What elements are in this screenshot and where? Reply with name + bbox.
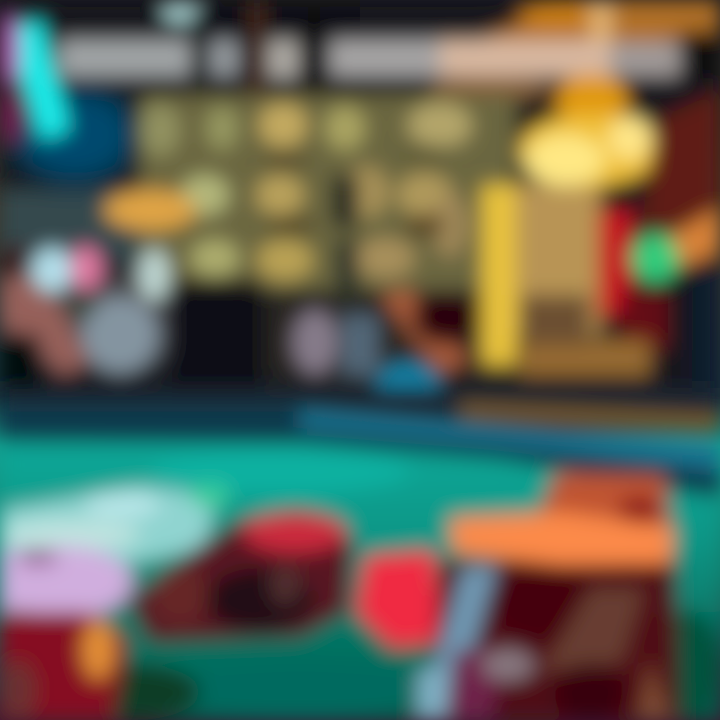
red curtain and green light [598, 90, 720, 408]
felt shading [70, 450, 720, 720]
top-left teal light [0, 0, 202, 183]
table felt [0, 442, 720, 720]
golden grid of blurred text [140, 95, 515, 300]
right chip stack [418, 473, 678, 720]
top-right gold streaks [480, 0, 720, 85]
warm column behind chandelier [515, 185, 600, 335]
white card glare on felt [0, 483, 230, 570]
background: upper room [0, 0, 720, 430]
middle red chips [128, 510, 354, 642]
title band [60, 0, 680, 120]
dark figures in middle [172, 280, 650, 406]
table rail [0, 388, 720, 505]
yellow chandelier glow [520, 74, 660, 186]
bright red chip [356, 550, 440, 648]
people at left [0, 244, 169, 390]
left chip stack [0, 546, 132, 720]
gold column [482, 185, 516, 365]
gold sign at left of grid [104, 190, 196, 230]
